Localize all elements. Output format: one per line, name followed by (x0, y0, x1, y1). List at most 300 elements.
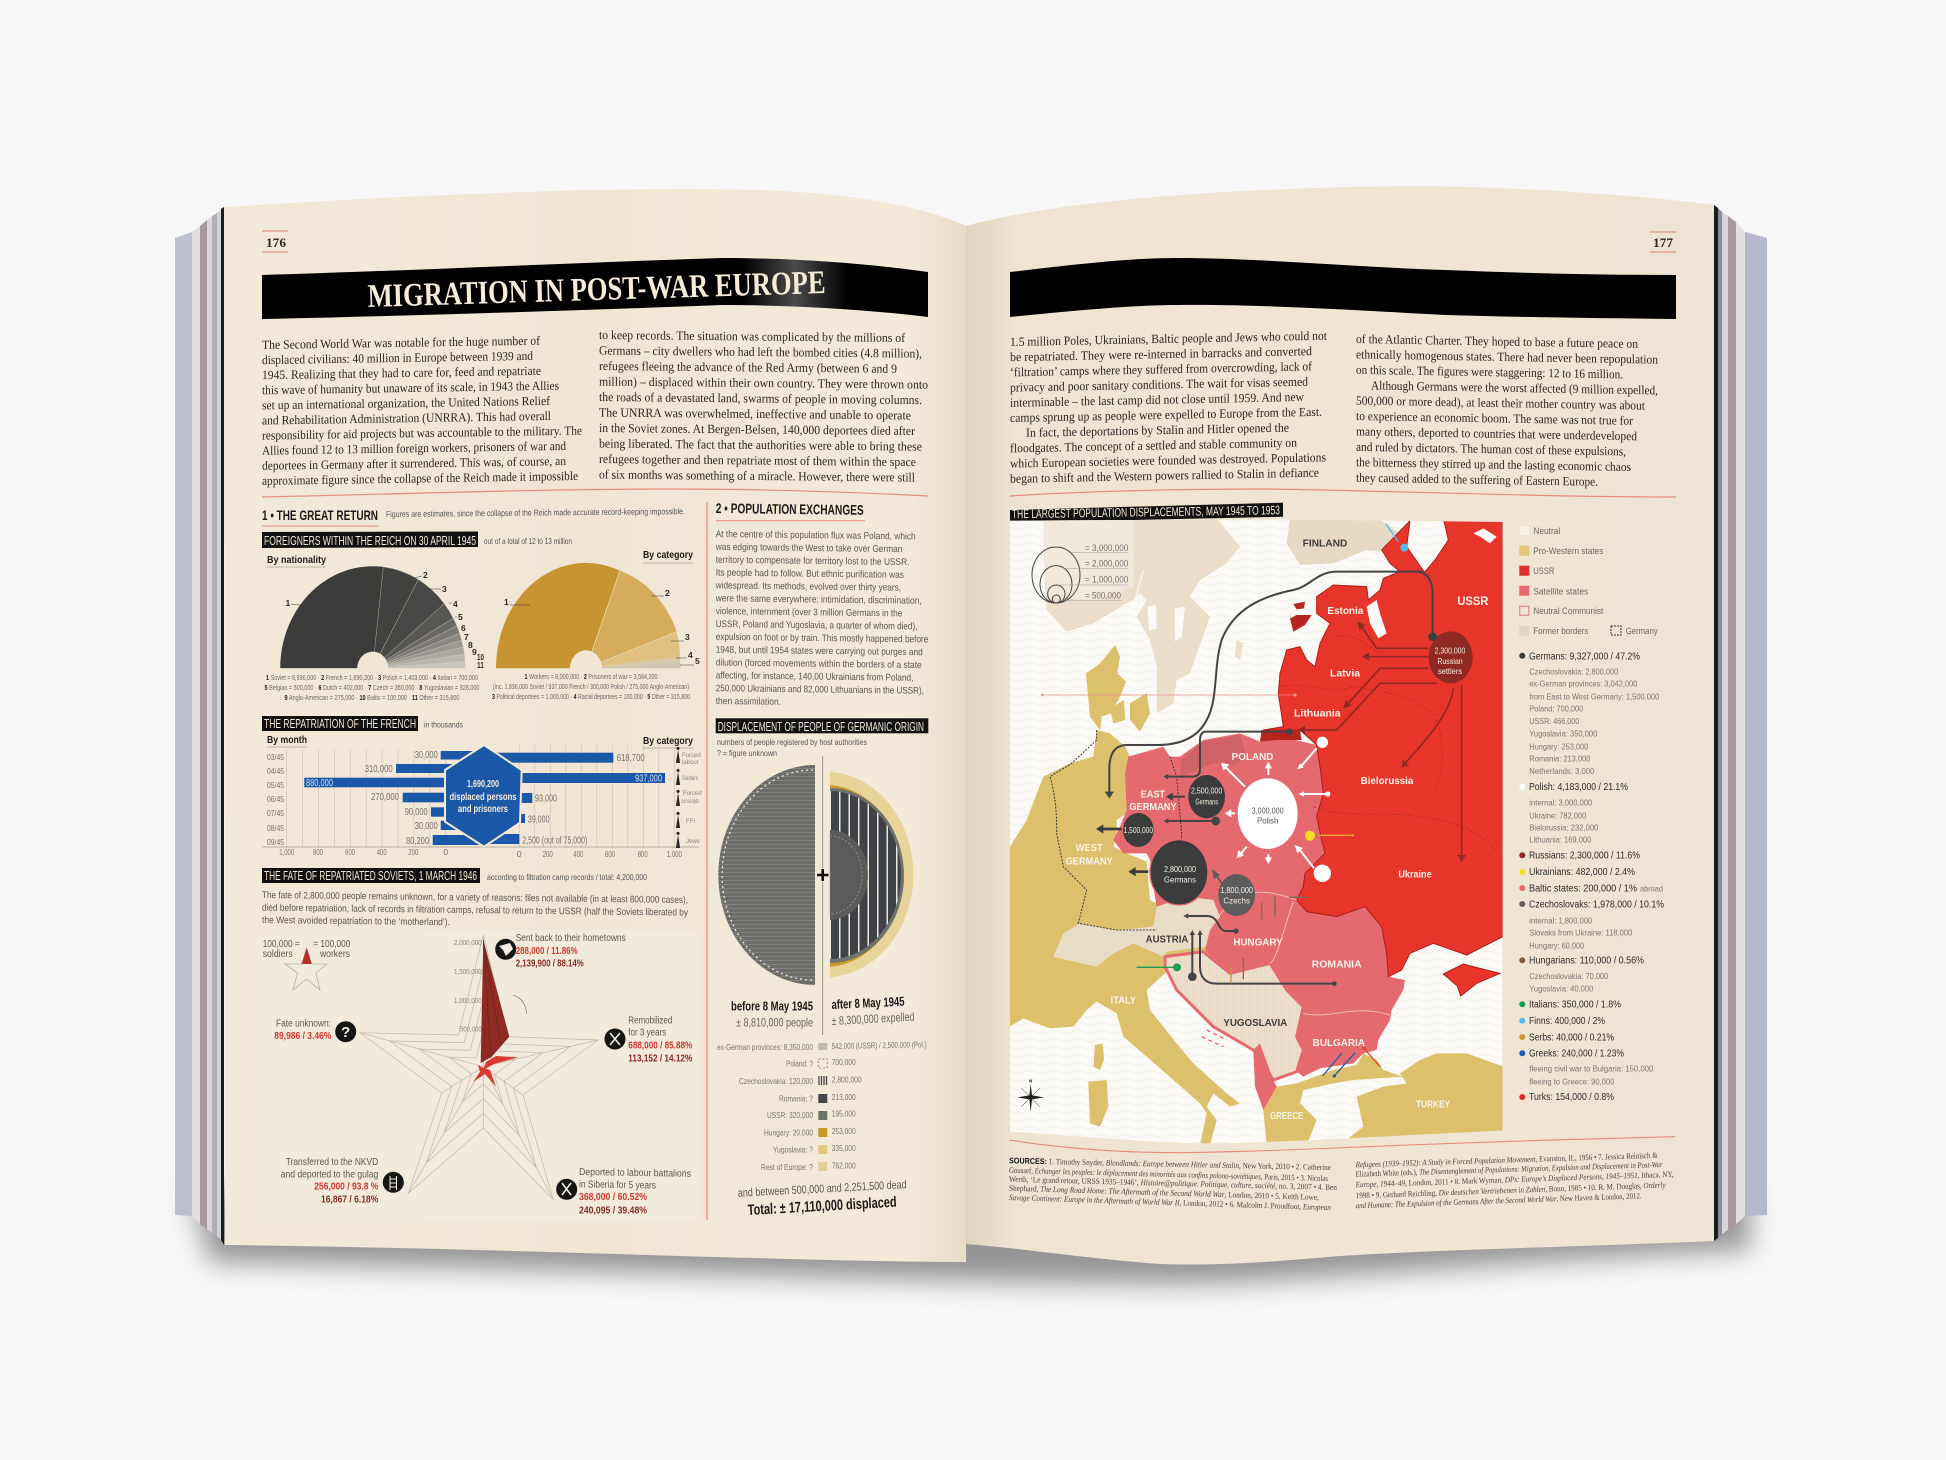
host table: Yugoslavia: ? (773, 1144, 813, 1154)
neutral: Finland (1287, 518, 1400, 565)
map title label: THE LARGEST POPULATION DISPLACEMENTS, MAY 1945 TO 1953 (1012, 503, 1280, 521)
section 2 paragraph (715, 529, 928, 710)
host table: Poland: ? (786, 1058, 813, 1068)
size scale circles: = 1,000,000 (1085, 575, 1128, 585)
German bubble 2,800,000 (1150, 840, 1208, 905)
map labels: YUGOSLAVIA (1223, 1018, 1287, 1029)
radar web (360, 935, 598, 1200)
displaced populations list: Czechoslovakia: 2,800,000 (1529, 666, 1618, 676)
Russian settlers arrows (1303, 627, 1462, 857)
soviets paragraph: died before repatriation, lack of records in filtration camps, refusal to return to the USSR (half the Soviets liberated by (262, 903, 688, 919)
map labels: Estonia (1327, 606, 1364, 617)
displaced populations list: Czechoslovakia: 70,000 (1529, 971, 1608, 981)
bar chart: repatriation of the French: 09/45 (267, 837, 284, 847)
intro text column 2: to keep records. The situation was complicated by the millions of (599, 328, 906, 345)
by category heading: By category (643, 735, 693, 747)
bar chart: repatriation of the French: 2,500 (out of 75,000) (522, 835, 587, 846)
host table: Rest of Europe: ? (761, 1162, 813, 1172)
soviets paragraph: the West avoided repatriation to the ‘motherland’). (262, 915, 450, 928)
fan chart: by category: 2 (665, 588, 670, 598)
callout: remobilized: 688,000 / 85.88% (628, 1040, 692, 1051)
fan chart: by nationality: 6 (461, 623, 466, 633)
bar chart: repatriation of the French: 600 (605, 849, 615, 859)
label: fate of repatriated Soviets: THE FATE OF REPATRIATED SOVIETS, 1 MARCH 1946 (264, 869, 477, 883)
section 1 heading: 1 • THE GREAT RETURN (262, 507, 378, 523)
bar chart: repatriation of the French: 618,700 (617, 753, 645, 764)
intro text column 2: in the Soviet zones. At Bergen-Belsen, 140,000 deportees died after (599, 421, 916, 438)
section 2 paragraph: was edging towards the West to take over German (715, 542, 902, 555)
total: and between 500,000 and 2,251,500 dead (738, 1179, 907, 1200)
bar chart: repatriation of the French: 05/45 (267, 780, 284, 790)
bar chart: repatriation of the French: 04/45 (267, 766, 284, 776)
fan chart: by nationality: 5 (458, 612, 463, 622)
title band (262, 258, 928, 319)
fan chart: by nationality: 8 (468, 640, 473, 650)
displaced populations list: Romania: 213,000 (1529, 754, 1590, 764)
category figures: conscripts (681, 799, 699, 805)
size scale circles: = 3,000,000 (1085, 543, 1128, 553)
intro text column 4: of the Atlantic Charter. They hoped to base a future peace on (1356, 332, 1639, 351)
sources column 2: Elizabeth White (eds.), The Disentanglement of Populations: Migration, Expulsion and Displacement in Post-War (1356, 1160, 1663, 1179)
star legend: = 100,000 (313, 939, 351, 950)
intro text column 4: ethnically homogenous states. There had never been repopulation (1356, 347, 1659, 367)
hexagon total: displaced persons (450, 792, 517, 803)
fan chart legend: by category: (inc. 1,836,000 Soviet / 937,000 French / 300,000 Polish / 275,000 Anglo-American) (493, 682, 689, 691)
host table: 253,000 (832, 1126, 856, 1136)
fan chart: by category: 5 (695, 656, 700, 666)
callout: remobilized: 113,152 / 14.12% (628, 1054, 692, 1065)
callout: hometowns: Sent back to their hometowns (516, 933, 626, 944)
bar chart: repatriation of the French: 06/45 (267, 794, 284, 804)
callout: labour battalions: Deported to labour battalions (579, 1167, 691, 1180)
sources column 1: Savage Continent: Europe in the Aftermath of World War II, London, 2012 • 6. Malcolm J. Proudfoot, European (1009, 1193, 1331, 1212)
satellite states (1113, 733, 1405, 1077)
fan chart legend: by nationality: 5 Belgian = 500,000 · 6 Dutch = 402,000 · 7 Czech = 350,000 · 8 Yugoslavian = 328,000 (264, 683, 480, 692)
intro text column 1: The Second World War was notable for the huge number of (262, 334, 541, 352)
fan chart: by nationality: 1 (286, 598, 290, 608)
bar chart: repatriation of the French: 39,000 (528, 815, 550, 826)
fan chart: by category (496, 563, 700, 686)
internal borders (1280, 636, 1500, 853)
host table: 700,000 (832, 1057, 856, 1067)
bar chart: repatriation of the French: 93,000 (535, 794, 557, 805)
bar chart: repatriation of the French: 270,000 (371, 792, 399, 803)
section 2 paragraph: affecting, for instance, 140,00 Ukrainians from Poland, (716, 670, 913, 684)
bar chart: repatriation of the French: 1,000 (279, 847, 294, 857)
intro text column 4: the bitterness they stirred up and the lasting economic chaos (1356, 455, 1631, 474)
label: displacement of Germanic people: ? = figure unknown (717, 748, 777, 758)
displaced populations list: Slovaks from Ukraine: 118,000 (1529, 928, 1632, 938)
Polish bubble: Polish (1257, 815, 1278, 825)
map labels: BULGARIA (1313, 1038, 1365, 1049)
section 2 paragraph: Its people had to follow. But ethnic purification was (716, 568, 904, 581)
section 1 note: Figures are estimates, since the collapse of the Reich made accurate record-keeping impossible. (386, 506, 685, 519)
intro text column 4: to experience an economic boom. The same was not true for (1356, 409, 1634, 428)
label: foreigners within the Reich: out of a total of 12 to 13 million (484, 536, 572, 546)
Russian settlers bubble: Russian (1437, 656, 1463, 666)
pro-western: Greece and Turkey (1263, 1053, 1403, 1145)
callout: fate unknown: ? (341, 1024, 350, 1041)
callout: fate unknown (274, 1019, 356, 1042)
callout: fate unknown: Fate unknown: (276, 1019, 331, 1030)
fan chart legend: by nationality (264, 673, 480, 702)
before 8 May 1945 label: ± 8,810,000 people (736, 1016, 813, 1030)
bar chart: repatriation of the French: 0 (517, 849, 522, 859)
displaced populations list: fleeing to Greece: 90,000 (1529, 1076, 1614, 1086)
intro text column 3: floodgates. The concept of a settled and stable community on (1010, 436, 1298, 455)
callout: remobilized: Remobilized (628, 1015, 672, 1026)
Polish bubble (1238, 778, 1298, 849)
host table: 542,000 (USSR) / 2,500,000 (Pol.) (832, 1039, 927, 1051)
halved circle chart (718, 756, 913, 1035)
fan chart legend: by category: 3 Political deportees = 1,000,000 · 4 Racial deportees = 100,000 · 5 Other = 315,800 (492, 692, 690, 701)
panel: star chart: 1,000,000 (454, 996, 482, 1005)
star legend: soldiers (263, 949, 293, 960)
intro text column 1: 1945. Realizing that they had to care for, feed and repatriate (262, 364, 541, 382)
sources column 2: 1998 • 9. Gerhard Reichling, Die deutschen Vertriebenen in Zahlen, Bonn, 1985 • 10. R. M. Douglas, Orderly (1356, 1180, 1666, 1200)
German bubble 2,800,000: Germans (1164, 874, 1197, 884)
host table: ex-German provinces: 8,350,000 (717, 1042, 813, 1052)
sources column 1 (1009, 1156, 1337, 1212)
sources column 1: SOURCES: 1. Timothy Snyder, Bloodlands: Europe between Hitler and Stalin, New York, 2010 • 2. Catherine (1009, 1156, 1331, 1172)
title: MIGRATION IN POST-WAR EUROPE (367, 265, 826, 315)
fan chart: by nationality: 10 (477, 652, 484, 662)
section 2 paragraph: widespread. Its methods, evolved over thirty years, (715, 580, 901, 594)
host table: Hungary: 20,000 (764, 1128, 813, 1138)
Yugoslavia (1165, 952, 1303, 1080)
map legend: Former borders (1533, 626, 1589, 636)
section 2 paragraph: USSR, Poland and Yugoslavia, a quarter of whom died), (716, 619, 917, 632)
fan chart: by nationality: 2 (423, 570, 428, 580)
category figures: Forced (682, 753, 701, 759)
callout: hometowns (495, 933, 626, 970)
icon: compass rose: N (1029, 1079, 1033, 1084)
map (1010, 518, 1503, 1145)
callout: NKVD gulag (281, 1157, 404, 1206)
section 2 paragraph: 1948, but until 1954 states were carrying out purges and (716, 645, 923, 658)
bar chart: repatriation of the French: 08/45 (267, 823, 284, 833)
category figures: labour (682, 760, 699, 766)
callout: labour battalions: 240,095 / 39.48% (579, 1205, 647, 1216)
left page (224, 189, 966, 1262)
intro text column 2: million) – displaced within their own country. They were thrown onto (599, 375, 928, 392)
map labels: USSR (1457, 594, 1489, 608)
map labels: AUSTRIA (1146, 935, 1188, 946)
map legend: Neutral (1533, 526, 1560, 536)
sources column 2 (1355, 1151, 1674, 1210)
map labels: Bielorussia (1361, 776, 1414, 787)
map legend: Pro-Western states (1533, 546, 1604, 556)
intro text column 2: refugees together and then repatriate most of them within the space (599, 452, 916, 469)
neutral: Switzerland and Austria (1053, 897, 1220, 967)
displaced populations list: Serbs: 40,000 / 0.21% (1529, 1033, 1614, 1044)
displaced populations list: Russians: 2,300,000 / 11.6% (1529, 850, 1640, 861)
page number 176 (262, 231, 288, 252)
displaced populations list: Italians: 350,000 / 1.8% (1529, 1000, 1621, 1011)
Polish bubble: 3,000,000 (1252, 805, 1284, 815)
section 2 paragraph: violence, internment (over 3 million Germans in the (716, 606, 902, 619)
intro text column 1: and Rehabilitation Administration (UNRRA). This had overall (262, 409, 551, 427)
intro text column 1: responsibility for aid projects but was accountable to the military. The (262, 424, 582, 443)
pro-western: West Europe and Italy (1010, 730, 1240, 1145)
intro text column 2: Germans – city dwellers who had left the bombed cities (4.8 million), (599, 344, 922, 361)
host table: Czechoslovakia: 120,000 (739, 1076, 813, 1086)
displaced populations list: internal: 1,800,000 (1529, 915, 1592, 925)
section 1 heading (262, 506, 685, 526)
map title label (1010, 503, 1283, 523)
host table: Romania: ? (779, 1094, 813, 1104)
page number 177 (1650, 232, 1676, 252)
map labels: GERMANY (1129, 802, 1177, 813)
star legend: workers (319, 949, 350, 960)
map labels: ITALY (1111, 995, 1136, 1006)
intro text column 1: this wave of humanity but unaware of its scale, in 1943 the Allies (262, 379, 559, 397)
label: fate of repatriated Soviets: according to filtration camp records / total: 4,200,000 (487, 872, 647, 882)
panel: star chart (262, 930, 698, 1222)
displaced populations list: Lithuania: 169,000 (1529, 835, 1591, 845)
star legend: 100,000 = (263, 939, 300, 950)
displaced populations list: Finns: 400,000 / 2% (1529, 1016, 1605, 1027)
fan chart legend: by nationality: 1 Soviet = 6,936,000 · 2 French = 1,690,200 · 3 Polish = 1,403,000 · 4 Italian = 700,000 (266, 673, 478, 682)
by category heading: By category (643, 549, 693, 561)
bar chart: repatriation of the French: 90,000 (405, 807, 428, 818)
category figures: Soldiers (682, 776, 698, 782)
fan chart legend: by category: 1 Workers = 8,000,000 · 2 Prisoners of war = 3,584,200 (524, 672, 658, 681)
category figures (676, 747, 702, 848)
map labels: FINLAND (1303, 539, 1347, 550)
Czech bubble: Czechs (1223, 895, 1251, 905)
Russian settlers bubble: settlers (1438, 666, 1463, 676)
label: repatriation of the French: in thousands (424, 720, 463, 730)
bar chart: repatriation of the French: 07/45 (267, 808, 284, 818)
displaced populations list: ex-German provinces: 3,042,000 (1529, 679, 1637, 689)
fan chart: by nationality: 3 (442, 584, 447, 594)
map labels: Ukraine (1398, 869, 1432, 880)
German bubble 2,500,000: 2,500,000 (1191, 786, 1222, 796)
callout: hometowns: 288,000 / 11.86% (516, 946, 578, 957)
German bubble 2,500,000 (1188, 775, 1225, 818)
after 8 May 1945 label (831, 994, 915, 1028)
displaced populations list: Baltic states: 200,000 / 1% (1529, 884, 1637, 895)
fan chart: by nationality: 11 (477, 660, 484, 670)
size scale circles: = 2,000,000 (1085, 559, 1128, 569)
section 2 heading: 2 • POPULATION EXCHANGES (716, 500, 864, 518)
total (738, 1179, 907, 1219)
Russian settlers bubble: 2,300,000 (1435, 646, 1465, 656)
displaced populations list: Bielorussia: 232,000 (1529, 823, 1598, 833)
section 2 paragraph: 250,000 Ukrainians and 82,000 Lithuanians in the USSR), (716, 683, 924, 697)
bar chart: repatriation of the French: 800 (638, 849, 648, 859)
page number 176: 176 (266, 235, 287, 250)
small arrows: Czech, Hungarian, Serb, Italian, Greek, Turk, Finn (1137, 524, 1398, 1076)
by month heading: By month (267, 734, 307, 746)
fan chart legend: by nationality: 9 Anglo-American = 275,000 · 10 Baltic = 100,000 · 11 Other = 315,800 (284, 693, 460, 702)
intro text column 1: approximate figure since the collapse of the Reich made it impossible (262, 469, 578, 488)
bar chart: repatriation of the French: 30,000 (415, 750, 438, 761)
after 8 May 1945 label: after 8 May 1945 (831, 994, 905, 1012)
hexagon total (445, 745, 522, 847)
fan chart: by category: 3 (685, 632, 690, 642)
displaced populations list: Yugoslavia: 40,000 (1529, 984, 1593, 994)
before 8 May 1945 label: before 8 May 1945 (731, 999, 813, 1014)
page number 177: 177 (1653, 235, 1674, 250)
Czech bubble (1218, 874, 1255, 916)
intro text column 3: began to shift and the Western powers rallied to Stalin in defiance (1010, 466, 1319, 486)
intro text column 4: 500,000 or more dead), at least their mother country was about (1356, 394, 1645, 413)
intro text column 4 (1356, 332, 1659, 490)
Czech bubble: 1,800,000 (1220, 885, 1253, 895)
intro text column 3: 1.5 million Poles, Ukrainians, Baltic people and Jews who could not (1010, 329, 1327, 349)
intro text column 4: on this scale. The figures were staggering: 12 to 16 million. (1356, 363, 1623, 381)
hexagon total: and prisoners (458, 804, 508, 815)
callout: remobilized (604, 1015, 692, 1065)
intro text column 2: of six months was something of a miracle. However, there were still (599, 468, 915, 485)
label: repatriation of the French: THE REPATRIATION OF THE FRENCH (264, 717, 416, 731)
soviets paragraph: The fate of 2,800,000 people remains unknown, for a variety of reasons: files not available (in at least 800,000 cases), (262, 890, 688, 906)
star legend (263, 939, 351, 990)
intro text column 1 (262, 333, 582, 488)
intro text column 3: interminable – the last camp did not close until 1959. And new (1010, 390, 1305, 410)
fan chart: by category: 1 (504, 597, 509, 607)
map labels: GERMANY (1066, 856, 1113, 867)
map legend: Neutral Communist (1533, 606, 1604, 616)
bar chart: repatriation of the French: 30,000 (415, 821, 438, 832)
callout: labour battalions: in Siberia for 5 years (579, 1179, 656, 1192)
displaced populations list: from East to West Germany: 1,500,000 (1529, 691, 1659, 701)
label: displacement of Germanic people: numbers of people registered by host authorities (717, 737, 867, 747)
label: displacement of Germanic people (716, 718, 928, 758)
intro text column 3: which European societies were founded was destroyed. Populations (1010, 450, 1326, 471)
intro text column 4: they caused added to the suffering of Eastern Europe. (1356, 471, 1598, 489)
callout: NKVD gulag: 256,000 / 93.8 % (314, 1181, 378, 1192)
displaced populations list: Netherlands: 3,000 (1529, 766, 1594, 776)
sources column 1: Werth, ‘Le grand retour, URSS 1935–1946’, Histoire@politique. Politique, culture, société, no. 3, 2007 • 4. Ben (1009, 1175, 1337, 1192)
callout: remobilized: for 3 years (628, 1028, 666, 1039)
Russian settlers bubble (1429, 631, 1473, 683)
right page stack (1714, 205, 1767, 1241)
callout: NKVD gulag: and deported to the gulag (281, 1169, 378, 1180)
intro text column 3: ‘filtration’ camps where they suffered from overcrowding, lack of (1010, 359, 1313, 379)
map labels: HUNGARY (1233, 938, 1283, 949)
displaced populations list (1519, 651, 1664, 1103)
panel: star chart: 500,000 (460, 1025, 482, 1034)
Ukrainians dot and arrow (1305, 831, 1354, 841)
host table: 335,000 (832, 1143, 856, 1153)
section 2 paragraph: were the same everywhere: intimidation, discrimination, (715, 593, 922, 607)
bar chart: repatriation of the French: 200 (408, 847, 418, 857)
label: foreigners within the Reich: FOREIGNERS WITHIN THE REICH ON 30 APRIL 1945 (264, 534, 476, 548)
neutral: Scandinavia (1043, 518, 1240, 713)
displaced populations list: Germans: 9,327,000 / 47.2% (1529, 651, 1640, 662)
before 8 May 1945 label (731, 999, 813, 1030)
intro text column 3: be repatriated. They were re-interned in barracks and converted (1010, 344, 1313, 364)
right page (966, 186, 1714, 1265)
total: Total: ± 17,110,000 displaced (747, 1194, 897, 1219)
USSR (1263, 518, 1503, 977)
map labels: Lithuania (1294, 709, 1341, 720)
bar chart: repatriation of the French (262, 745, 702, 859)
displaced populations list: Hungarians: 110,000 / 0.56% (1529, 955, 1644, 966)
Polish arrows (1225, 748, 1325, 868)
German bubble 2,800,000: 2,800,000 (1164, 864, 1196, 874)
displaced populations list: USSR: 466,000 (1529, 716, 1579, 726)
displaced populations list: Poland: 700,000 (1529, 704, 1583, 714)
intro text column 1: displaced civilians: 40 million in Europe between 1939 and (262, 349, 534, 367)
displaced populations list: Hungary: 60,000 (1529, 940, 1584, 950)
section 2 paragraph: At the centre of this population flux was Poland, which (716, 529, 916, 542)
map labels: EAST (1141, 790, 1165, 801)
displaced populations list: Hungary: 253,000 (1529, 741, 1588, 751)
displaced populations list: Czechoslovaks: 1,978,000 / 10.1% (1529, 900, 1664, 911)
fan chart: by category: 4 (688, 650, 693, 660)
sources column 1: Goussef, Échanger les peuples: le déplacement des minorités aux confins polono-soviétiques, Paris, 2015 • 3. Nicolas (1009, 1165, 1328, 1183)
map labels: ROMANIA (1312, 959, 1362, 970)
intro text column 2: being liberated. The fact that the authorities were able to bring these (599, 437, 922, 454)
German bubble 1,500,000: 1,500,000 (1124, 825, 1153, 835)
displacement arrow lines (1109, 572, 1433, 984)
displaced populations list: fleeing civil war to Bulgaria: 150,000 (1529, 1064, 1653, 1074)
displaced populations list: Ukrainians: 482,000 / 2.4% (1529, 867, 1635, 878)
map legend (1519, 526, 1658, 636)
bar chart: repatriation of the French: 937,000 (635, 774, 662, 785)
size scale circles: = 500,000 (1085, 590, 1121, 600)
bar chart: repatriation of the French: 880,000 (306, 778, 333, 789)
sources column 2: Refugees (1939–1952): A Study in Forced Population Movement, Evanston, IL, 1956 • 7. Jessica Reinisch & (1355, 1151, 1658, 1169)
callout: NKVD gulag: 16,867 / 6.18% (321, 1195, 378, 1206)
category figures: Jews (686, 839, 700, 845)
map labels: POLAND (1232, 752, 1273, 763)
pro-western: Denmark (1086, 645, 1126, 730)
map labels: WEST (1076, 843, 1103, 854)
callout: NKVD gulag: Transferred to the NKVD (286, 1157, 378, 1168)
map labels (1066, 539, 1489, 1122)
soviets paragraph (262, 890, 688, 931)
label: displacement of Germanic people: DISPLACEMENT OF PEOPLE OF GERMANIC ORIGIN (718, 720, 924, 734)
host table (717, 1039, 927, 1172)
callout: fate unknown: 89,986 / 3.46% (274, 1031, 331, 1042)
displaced populations list: abroad (1640, 884, 1663, 894)
category figures: Forced (683, 791, 702, 797)
intro text column 1: set up an international organization, the United Nations Relief (262, 394, 551, 412)
intro text column 4: and ruled by dictators. The human cost of these expulsions, (1356, 440, 1626, 459)
bar chart: repatriation of the French: 400 (377, 847, 387, 857)
displaced populations list: Greeks: 240,000 / 1.23% (1529, 1049, 1624, 1060)
host table: 195,000 (832, 1108, 856, 1118)
callout: labour battalions (556, 1167, 691, 1216)
German bubble 2,500,000: Germans (1195, 796, 1218, 806)
intro text column 3: In fact, the deportations by Stalin and Hitler opened the (1026, 421, 1289, 440)
callout: labour battalions: 368,000 / 60.52% (579, 1192, 647, 1203)
section 2 paragraph: then assimilation. (716, 696, 781, 708)
Albania (1253, 1043, 1277, 1110)
bar chart: repatriation of the French: 200 (543, 849, 553, 859)
after 8 May 1945 label: ± 8,300,000 expelled (831, 1010, 915, 1028)
fan chart: by nationality: 9 (472, 647, 477, 657)
host table: USSR: 320,000 (767, 1110, 813, 1120)
host table: 2,800,000 (832, 1074, 862, 1084)
bar chart: repatriation of the French: 80,200 (406, 836, 429, 847)
intro text column 3: camps sprung up as people were expelled to Europe from the East. (1010, 405, 1322, 425)
bar chart: repatriation of the French: 310,000 (365, 764, 393, 775)
map labels: GREECE (1270, 1111, 1304, 1122)
map legend: Germany (1626, 626, 1658, 636)
bar chart: repatriation of the French: 0 (443, 847, 448, 857)
bar chart: repatriation of the French: 03/45 (267, 752, 284, 762)
host table: 762,000 (832, 1160, 856, 1170)
host table: 213,000 (832, 1092, 856, 1102)
fan chart legend: by category (492, 672, 690, 701)
intro text column 1: deportees in Germany after it surrendered. This was, of course, an (262, 454, 567, 473)
